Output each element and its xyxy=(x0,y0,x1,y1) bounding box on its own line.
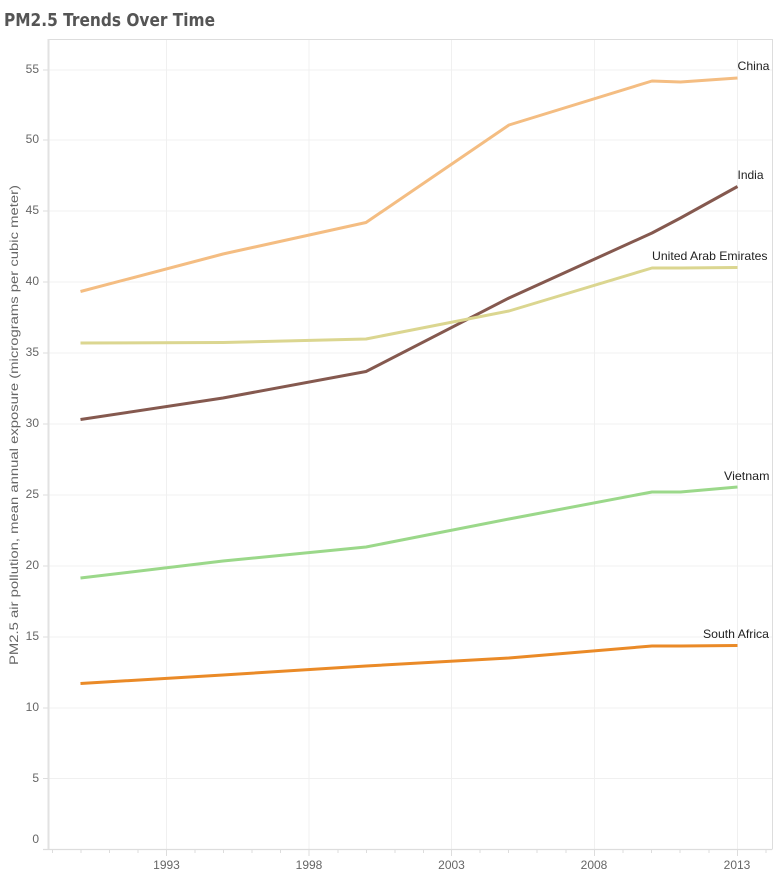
y-axis labels: 5 xyxy=(32,771,39,785)
series labels: India xyxy=(738,168,764,182)
x-axis labels xyxy=(153,858,751,872)
title: PM2.5 Trends Over Time xyxy=(4,10,215,31)
line: China xyxy=(80,78,738,292)
y-axis labels: 30 xyxy=(26,416,39,430)
y-axis labels: 15 xyxy=(26,629,39,643)
series labels: China xyxy=(738,59,770,73)
line: South Africa xyxy=(80,646,738,684)
y-axis labels: 40 xyxy=(26,274,39,288)
y-axis labels: 25 xyxy=(26,487,39,501)
y-axis labels xyxy=(26,62,39,846)
series labels: South Africa xyxy=(703,627,769,641)
y-axis labels: 20 xyxy=(26,558,39,572)
y-axis labels: 0 xyxy=(32,832,39,846)
y-axis labels: 55 xyxy=(26,62,39,76)
y-axis labels: 10 xyxy=(26,700,39,714)
series labels: Vietnam xyxy=(724,469,770,483)
series labels: United Arab Emirates xyxy=(652,249,768,263)
x-axis labels: 2008 xyxy=(581,858,608,872)
y-axis labels: 50 xyxy=(26,132,39,146)
line: United Arab Emirates xyxy=(80,268,738,343)
x-axis labels: 1993 xyxy=(153,858,180,872)
y-axis labels: 45 xyxy=(26,203,39,217)
series labels xyxy=(652,59,770,641)
y-axis title: PM2.5 air pollution, mean annual exposure (micrograms per cubic meter) xyxy=(7,185,21,665)
line: India xyxy=(80,186,738,420)
x-axis labels: 2003 xyxy=(438,858,465,872)
x-axis labels: 1998 xyxy=(296,858,323,872)
line: Vietnam xyxy=(80,487,738,578)
x-axis labels: 2013 xyxy=(724,858,751,872)
y-axis labels: 35 xyxy=(26,345,39,359)
